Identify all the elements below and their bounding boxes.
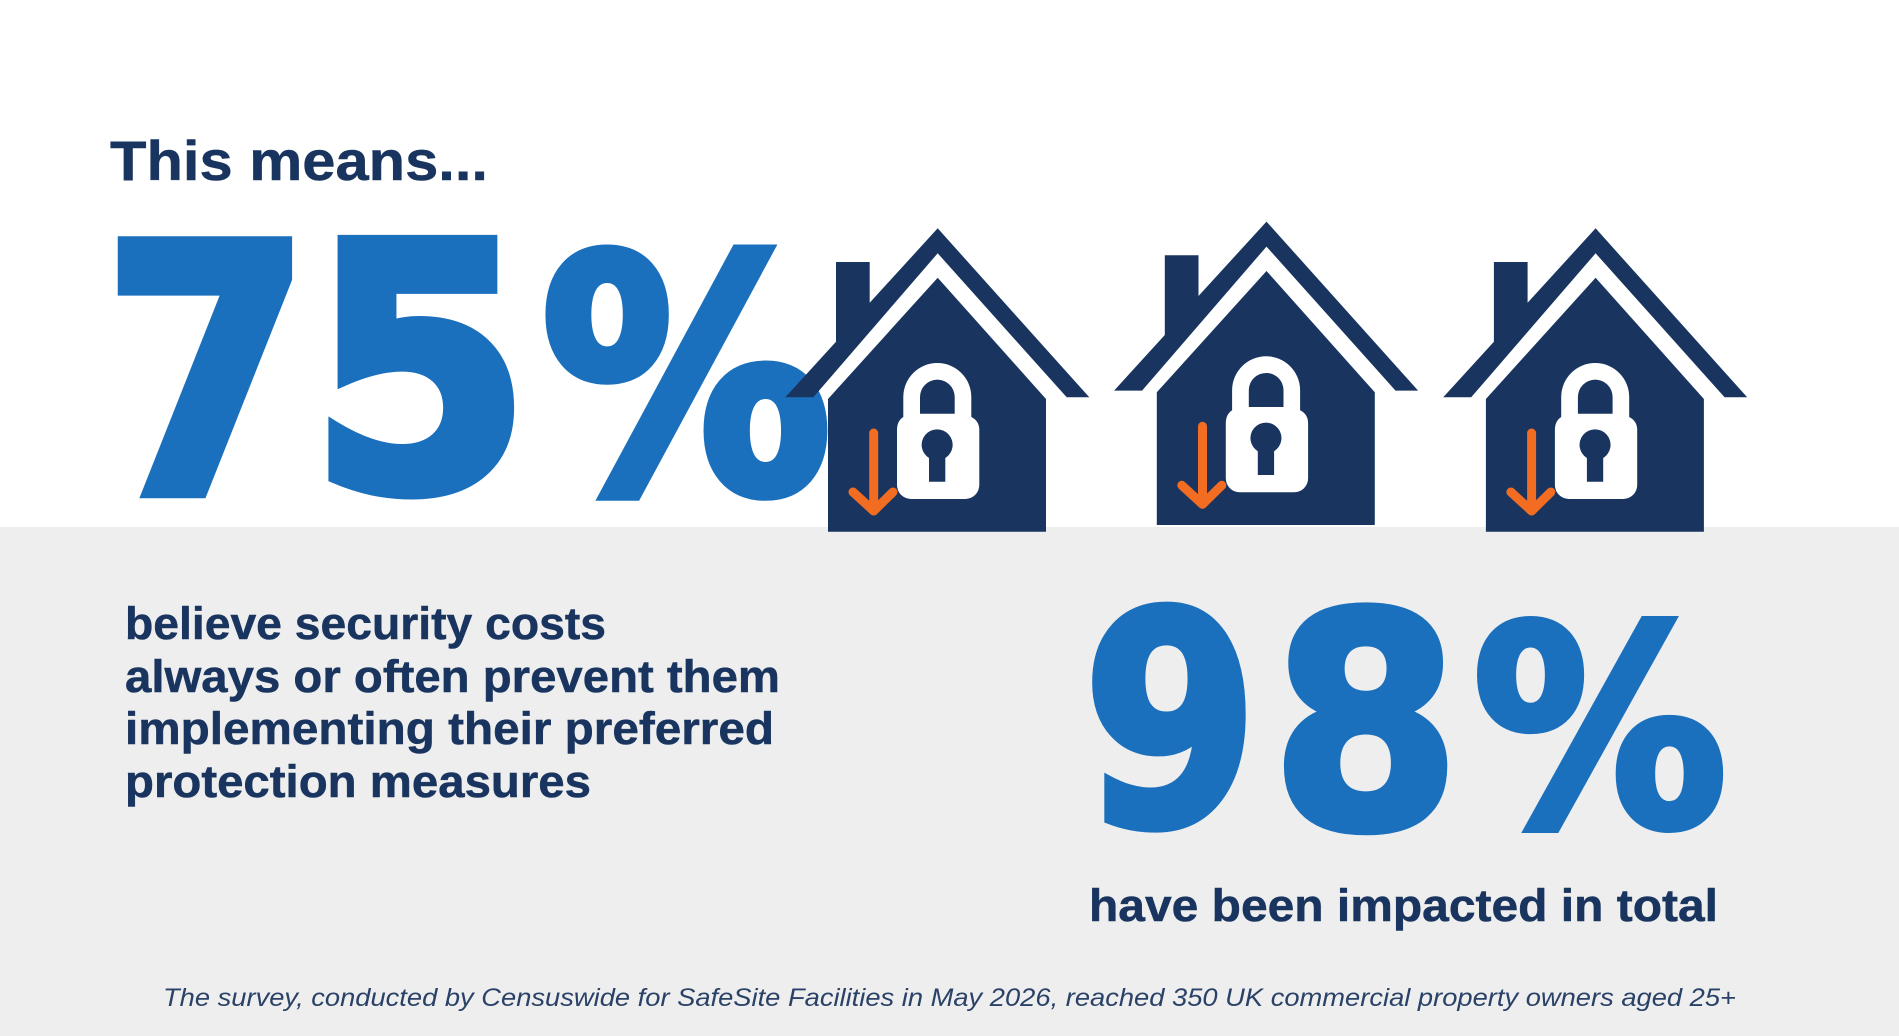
big stat: 98%: % xyxy=(1473,570,1727,890)
big stat: 75%: 7 xyxy=(103,174,311,573)
big stat: 75%: % xyxy=(542,191,831,567)
icon: house 2 with padlock and down arrow xyxy=(1114,222,1418,525)
text block: 75% description: protection measures xyxy=(125,756,591,807)
text block: 98% description: have been impacted in total xyxy=(1089,880,1718,931)
text block: 75% description: believe security costs xyxy=(125,598,606,649)
big stat: 75%: 5 xyxy=(310,173,531,569)
text block: 75% description: implementing their preferred xyxy=(125,703,774,754)
icon: house 3 with padlock and down arrow xyxy=(1443,228,1747,532)
big stat: 98%: 8 xyxy=(1272,552,1460,897)
text block: 75% description xyxy=(125,598,780,807)
panel: grey lower background xyxy=(0,527,1899,1036)
big stat: 98%: 9 xyxy=(1083,551,1258,894)
text block: 75% description: always or often prevent them xyxy=(125,651,780,702)
title: This means... xyxy=(110,129,488,192)
big stat: 98% xyxy=(1083,551,1727,897)
footnote: survey source: The survey, conducted by Censuswide for SafeSite Facilities in May 2026, reached 350 UK commercial property owners aged 25+ xyxy=(163,984,1736,1012)
icon: house 1 with padlock and down arrow xyxy=(785,228,1089,532)
big stat: 75% xyxy=(103,173,831,573)
